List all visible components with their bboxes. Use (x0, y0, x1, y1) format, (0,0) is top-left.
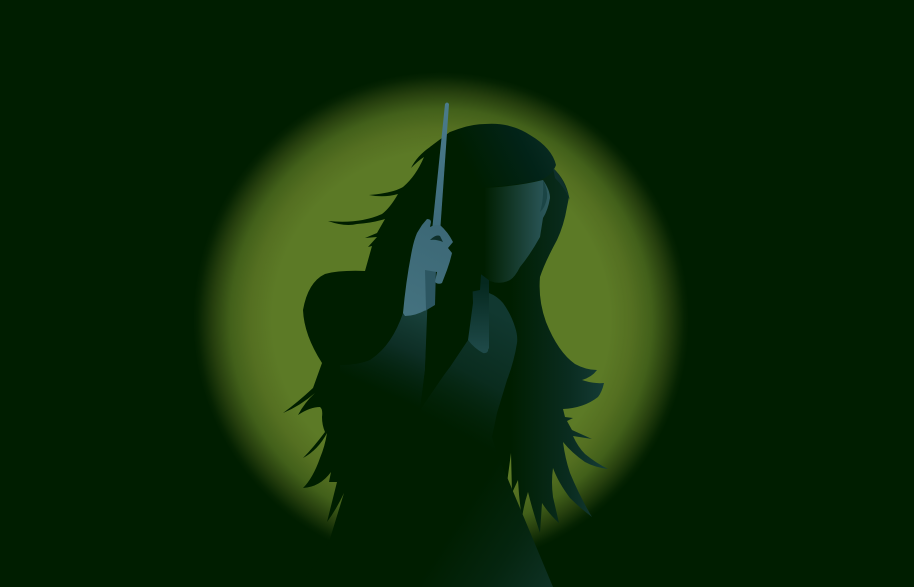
hair: top of head (430, 124, 556, 300)
wand handle (425, 268, 436, 311)
hand (403, 219, 453, 316)
hair: right back locks (470, 150, 608, 533)
dress (420, 340, 553, 587)
hair strand over temple (540, 180, 547, 212)
shoulder and bodice (420, 293, 517, 475)
right ear-side wisp (553, 168, 570, 200)
spotlight circle (193, 72, 689, 568)
finger crease (430, 236, 443, 242)
central hair strand (420, 275, 473, 410)
face (478, 180, 550, 283)
neck (468, 272, 489, 353)
wand shaft (432, 102, 449, 226)
sleeve (340, 305, 428, 412)
figure silhouette (283, 124, 608, 587)
hair: left locks and shoulder mass (283, 132, 490, 587)
wand (425, 102, 449, 311)
